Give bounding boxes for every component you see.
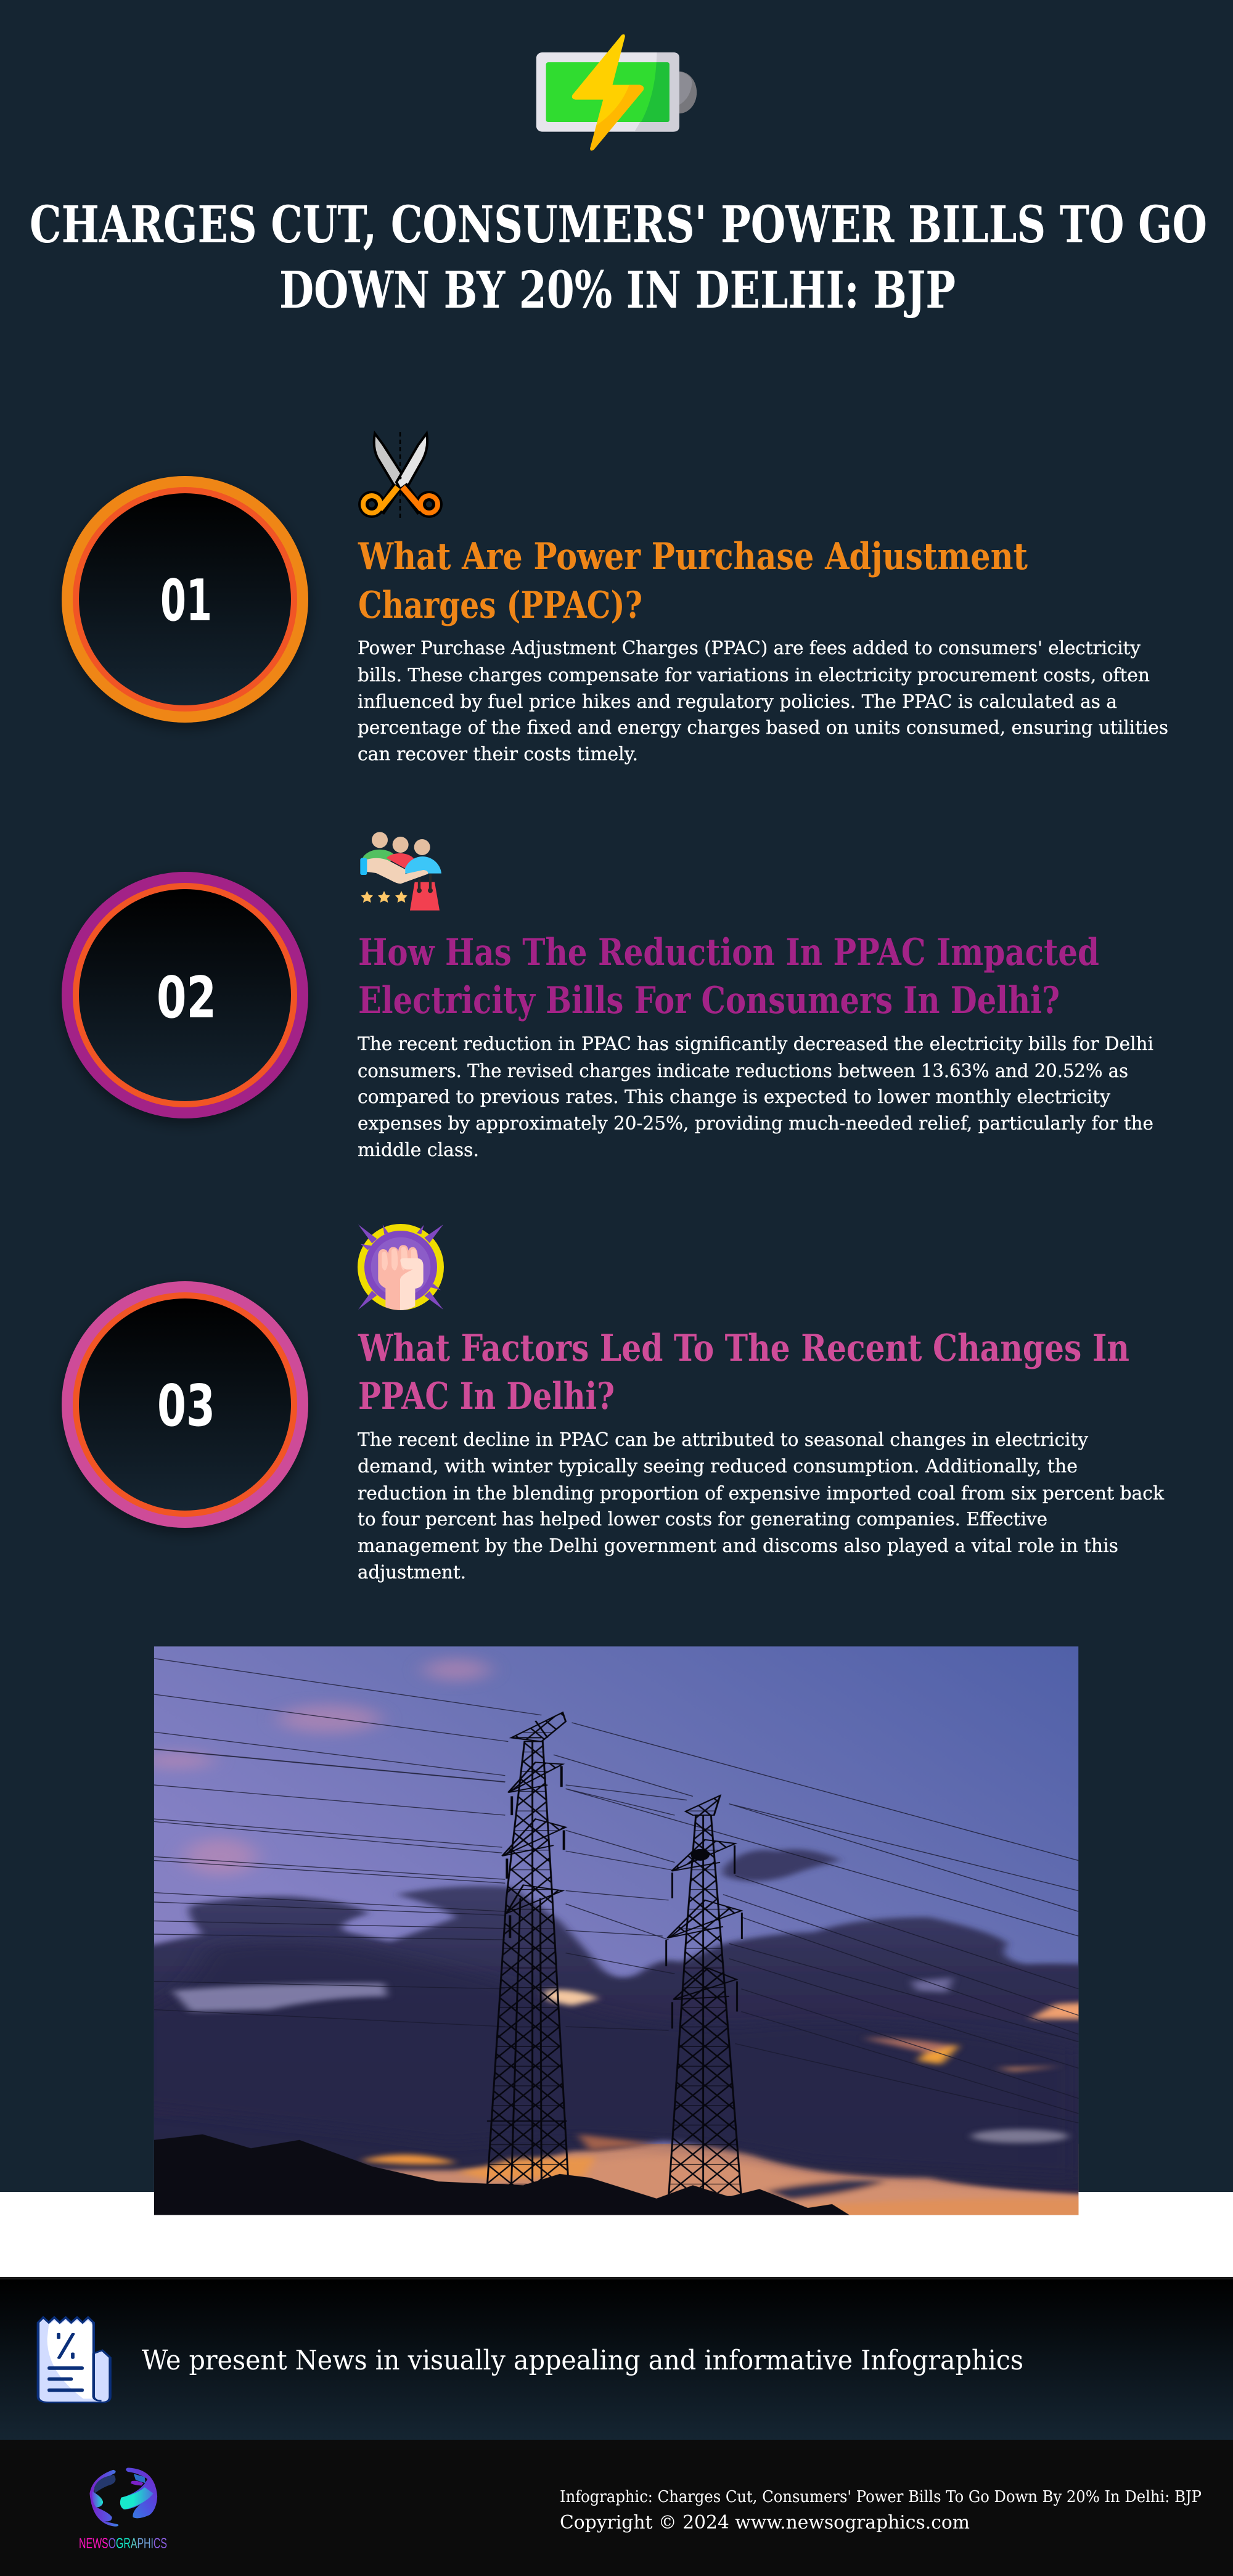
number badge 03 (62, 1281, 308, 1528)
horizon base glow (330, 2144, 1092, 2219)
heading 01: Charges (PPAC)? (358, 584, 642, 627)
heading 02: How Has The Reduction In PPAC Impacted (358, 931, 1099, 974)
body text 02: compared to previous rates. This change is expected to lower monthly electricity (358, 1086, 1110, 1108)
body text 03: adjustment. (358, 1562, 466, 1583)
sunset glow (360, 1990, 1092, 2223)
body text 03: The recent decline in PPAC can be attributed to seasonal changes in electricity (358, 1429, 1088, 1451)
power lines (154, 1659, 1078, 2123)
body text 01: Power Purchase Adjustment Charges (PPAC) are fees added to consumers' electricity (358, 638, 1141, 659)
panel: section 03 (62, 1224, 1165, 1583)
pink cloud wisps (142, 1659, 490, 1876)
heading 03 (358, 1327, 1129, 1418)
footer credits: Infographic: Charges Cut, Consumers' Power Bills To Go Down By 20% In Delhi: BJP (560, 2488, 1202, 2506)
logo (79, 2467, 167, 2552)
number badge 01: 01 (160, 567, 212, 634)
darker cloud mass (124, 1942, 1078, 2178)
logo: NEWSOGRAPHICS (79, 2535, 167, 2552)
panel: section 01 (62, 432, 1168, 765)
body text 01: percentage of the fixed and energy charges based on units consumed, ensuring utilities (358, 717, 1168, 739)
far cloud (723, 1850, 841, 1881)
body text 01 (358, 638, 1168, 765)
title: DOWN BY 20% IN DELHI: BJP (279, 261, 956, 320)
heading 01: What Are Power Purchase Adjustment (358, 535, 1028, 578)
body text 01: bills. These charges compensate for variations in electricity procurement costs, often (358, 665, 1150, 686)
heading 01 (358, 535, 1028, 627)
panel: tagline banner (0, 2279, 1233, 2440)
body text 03: to four percent has helped lower costs for generating companies. Effective (358, 1509, 1047, 1530)
light patches in clouds (172, 1977, 1068, 2143)
body text 03: management by the Delhi government and discoms also played a vital role in this (358, 1535, 1118, 1557)
divider line (0, 2277, 1233, 2279)
title (30, 195, 1207, 320)
tower left (487, 1712, 568, 2189)
photo: transmission towers at dusk (154, 1646, 1079, 2215)
body text 03: demand, with winter typically seeing reduced consumption. Additionally, the (358, 1456, 1078, 1477)
body text 02: The recent reduction in PPAC has significantly decreased the electricity bills for Delhi (358, 1033, 1153, 1055)
number badge 01 (62, 476, 308, 723)
white band (0, 2192, 1233, 2277)
body text 01: influenced by fuel price hikes and regulatory policies. The PPAC is calculated as a (358, 691, 1117, 713)
body text 02: expenses by approximately 20-25%, providing much-needed relief, particularly for the (358, 1113, 1153, 1134)
mountains (154, 2135, 850, 2215)
panel: footer (0, 2440, 1233, 2576)
icon: receipt (38, 2318, 110, 2402)
panel: section 02 (62, 832, 1153, 1161)
heading 03: PPAC In Delhi? (358, 1375, 615, 1418)
icon: people in a hand with shopping bag (360, 832, 441, 911)
number badge 02: 02 (157, 964, 216, 1031)
icon: raised fist (358, 1224, 444, 1310)
tagline: We present News in visually appealing and informative Infographics (142, 2345, 1023, 2376)
body text 02 (358, 1033, 1153, 1161)
body text 02: consumers. The revised charges indicate reductions between 13.63% and 20.52% as (358, 1060, 1128, 1082)
body text 03 (358, 1429, 1165, 1583)
number badge 03: 03 (157, 1372, 215, 1439)
heading 02 (358, 931, 1099, 1022)
body text 03: reduction in the blending proportion of expensive imported coal from six percent back (358, 1483, 1165, 1504)
body text 01: can recover their costs timely. (358, 744, 638, 765)
footer credits (560, 2488, 1202, 2533)
footer credits: Copyright © 2024 www.newsographics.com (560, 2512, 970, 2533)
tower right (666, 1795, 742, 2197)
main cloud bank (112, 1886, 1129, 2197)
heading 02: Electricity Bills For Consumers In Delhi? (358, 979, 1060, 1022)
number badge 02 (62, 872, 308, 1118)
icon: scissors (358, 432, 443, 519)
icon: battery with lightning bolt (536, 34, 697, 150)
body text 02: middle class. (358, 1139, 479, 1161)
